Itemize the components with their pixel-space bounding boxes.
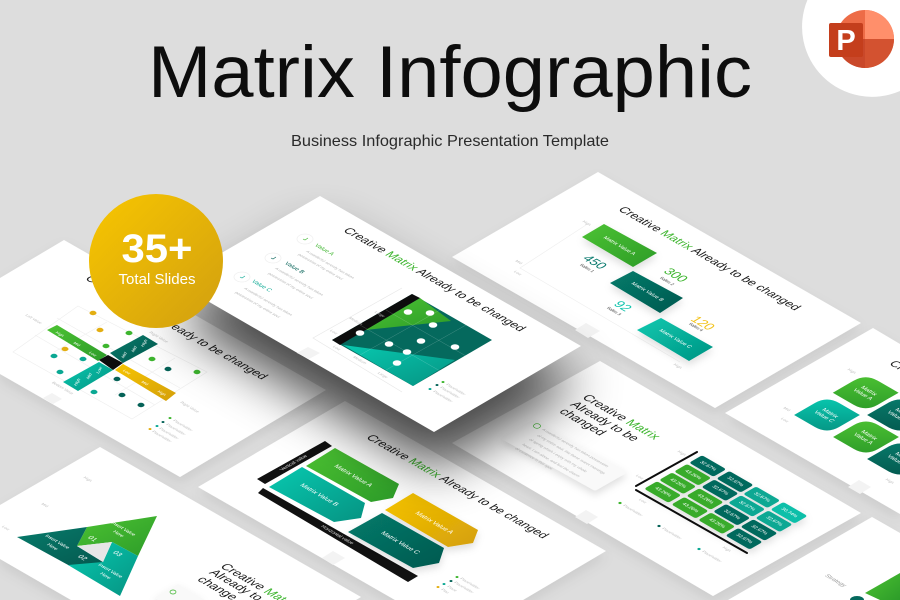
leaf: green lower: Value A bbox=[851, 432, 874, 446]
value item C: possession of my entire soul bbox=[234, 291, 282, 318]
axis labels: Mid bbox=[514, 259, 524, 265]
legend: Placeholder bbox=[445, 383, 468, 396]
cross arm: teal: High bbox=[73, 377, 81, 387]
percentage cells: 32.67% bbox=[722, 509, 742, 521]
percentage cells: 43.26% bbox=[695, 493, 715, 505]
text card: heart. I am alone, and feel the charm bbox=[521, 443, 582, 478]
badge: 35+ total slides: 35+ bbox=[122, 227, 192, 271]
panel: slide with arrow blocks bbox=[198, 401, 606, 600]
page tab bbox=[848, 480, 871, 494]
axis labels: Medium bbox=[352, 355, 369, 365]
block: yellow: Matrix Value A bbox=[413, 511, 456, 535]
title: Matrix Infographic bbox=[148, 32, 752, 113]
text card: of spring which I enjoy with my whole bbox=[528, 438, 590, 473]
band: vertical value bbox=[257, 441, 332, 484]
percentage cells: 32.67% bbox=[698, 460, 718, 472]
block: dark: Matrix Value C bbox=[379, 531, 422, 555]
dark marker bbox=[850, 596, 864, 600]
axis labels bbox=[1, 476, 94, 531]
slide title: changed bbox=[556, 406, 610, 437]
axis labels: Mid bbox=[782, 406, 792, 412]
percentage cells: 43.26% bbox=[680, 502, 700, 514]
axis labels: Mid bbox=[40, 502, 50, 508]
page tab bbox=[575, 323, 600, 338]
axis labels: Low bbox=[513, 270, 523, 276]
triangle chart: 01 bbox=[86, 535, 98, 543]
percentage cells: 32.67% bbox=[734, 533, 754, 545]
percentage cells bbox=[644, 455, 808, 549]
text card bbox=[155, 584, 205, 600]
stat: 300: Sales 2 bbox=[658, 276, 676, 286]
axis labels: High bbox=[846, 368, 858, 374]
stat: 92: 92 bbox=[610, 299, 636, 313]
value item A: possession of my entire soul bbox=[297, 253, 345, 280]
axis labels: High bbox=[676, 450, 688, 456]
block: yellow bbox=[385, 493, 478, 547]
leaf: teal bbox=[794, 396, 860, 434]
percentage cells: 32.67% bbox=[710, 485, 730, 496]
axis line: horizontal bbox=[636, 490, 747, 553]
page tab bbox=[322, 551, 345, 565]
cross arm: teal: Mid bbox=[85, 372, 93, 380]
axis labels: Large bbox=[373, 310, 387, 318]
percentage cells: 32.67% bbox=[764, 516, 784, 527]
cross arm: dark: Mid bbox=[130, 345, 138, 353]
subtitle: Business Infographic Presentation Template bbox=[291, 133, 609, 150]
box: matrix value C bbox=[637, 318, 713, 361]
cross center bbox=[99, 355, 123, 370]
axis labels: Low bbox=[635, 474, 645, 480]
legend: Placeholder bbox=[459, 577, 482, 590]
band: horizontal value bbox=[258, 488, 418, 582]
band: horizontal value: Horizontal value bbox=[319, 525, 355, 546]
panel: slide with percentage grid bbox=[452, 361, 861, 596]
badge: 35+ total slides bbox=[89, 194, 223, 328]
axis labels bbox=[635, 450, 733, 552]
value item B: Value B bbox=[282, 261, 305, 275]
axis labels: High bbox=[82, 476, 94, 482]
axis labels bbox=[513, 220, 684, 369]
text card bbox=[505, 423, 623, 488]
value item C: Value C bbox=[249, 279, 273, 293]
legend bbox=[148, 417, 195, 443]
text card: A wonderful serenity has taken possession bbox=[541, 428, 610, 468]
leaf: teal: Value C bbox=[812, 410, 836, 424]
triangle chart: Insert Value bbox=[109, 521, 137, 537]
green block bbox=[865, 573, 900, 600]
cross arm: green bbox=[47, 325, 107, 361]
stat: 450: Sales 1 bbox=[578, 263, 596, 273]
triangle chart: Here bbox=[111, 530, 125, 538]
legend: Placeholder bbox=[439, 386, 462, 399]
axis line: vertical bbox=[636, 452, 697, 486]
legend bbox=[436, 576, 482, 594]
leaf: teal: Matrix bbox=[820, 408, 839, 419]
stat: 120: 120 bbox=[687, 314, 719, 332]
page tab bbox=[297, 347, 320, 359]
axis labels bbox=[24, 313, 202, 414]
legend: Placeholder bbox=[158, 427, 181, 440]
triangle chart: Here bbox=[45, 543, 59, 551]
axis labels: High bbox=[721, 546, 733, 552]
percentage cells: 43.26% bbox=[707, 518, 727, 529]
axis labels: Large bbox=[376, 371, 390, 379]
legend: Place bbox=[446, 585, 459, 593]
legend: Placeholder bbox=[453, 581, 476, 594]
percentage cells: 43.26% bbox=[668, 478, 688, 489]
axis labels: High bbox=[581, 220, 593, 226]
chart points bbox=[356, 309, 459, 366]
cross arm: yellow bbox=[115, 364, 176, 401]
page tab bbox=[575, 510, 598, 524]
leaf: green upper bbox=[833, 374, 899, 412]
percentage cells: 32.67% bbox=[749, 524, 769, 536]
box: matrix value C: Matrix Value C bbox=[657, 329, 693, 349]
block: green: Matrix Value A bbox=[332, 464, 375, 488]
panel: slide with cross matrix bbox=[0, 240, 326, 477]
icon: powerpoint logo: P bbox=[836, 25, 856, 57]
text card: of my entire soul, like these sweet mornings bbox=[536, 434, 607, 475]
value item A: A wonderful serenity has taken bbox=[305, 250, 356, 279]
legend bbox=[428, 381, 468, 403]
axis labels: High bbox=[884, 478, 896, 484]
panel: slide with value boxes bbox=[452, 172, 861, 408]
cross arm: yellow: Mid bbox=[140, 380, 150, 386]
strategy label: Strategy bbox=[823, 574, 847, 588]
panel: slide with leaf matrix bbox=[725, 328, 900, 514]
axis labels: Low bbox=[329, 329, 339, 335]
legend: Placeholder bbox=[661, 527, 684, 540]
shadow cast by centre slide bbox=[173, 234, 581, 470]
value item B bbox=[265, 253, 325, 299]
axis labels bbox=[329, 310, 390, 379]
stat: 450: 450 bbox=[579, 253, 611, 271]
badge: 35+ total slides: Total Slides bbox=[118, 271, 196, 288]
cross arm: dark: High bbox=[140, 338, 148, 348]
icon: powerpoint logo bbox=[802, 0, 900, 97]
percentage cells: 43.26% bbox=[653, 486, 673, 498]
legend: Plac bbox=[440, 588, 451, 594]
axis labels: Right Value bbox=[148, 331, 171, 344]
triangle chart: Here bbox=[98, 572, 112, 580]
percentage cells: 30.74% bbox=[779, 507, 799, 519]
chart frame bbox=[313, 288, 402, 392]
cross arm: green: Mid bbox=[72, 341, 82, 347]
percentage cells: 43.26% bbox=[683, 469, 703, 481]
cross arm: green: Low bbox=[88, 351, 98, 357]
percentage cells: 32.67% bbox=[752, 492, 772, 503]
value item A bbox=[297, 234, 356, 280]
slide title: Creative Matrix Already to be changed bbox=[363, 433, 553, 540]
axis labels: Right Value bbox=[179, 401, 202, 414]
axis labels bbox=[780, 368, 896, 484]
legend: Placeholder bbox=[701, 550, 724, 563]
band: vertical value: Vertical value bbox=[279, 454, 310, 472]
box: matrix value B: Matrix Value B bbox=[629, 282, 665, 302]
slide title: Creative Matrix bbox=[579, 392, 664, 442]
slide title: Creative Matrix Already to be changed bbox=[82, 274, 272, 381]
cross arm: dark bbox=[110, 335, 158, 363]
triangle chart: Insert Value bbox=[43, 534, 71, 550]
cross arm: dark: Mid bbox=[120, 351, 128, 359]
value item A: Value A bbox=[312, 243, 335, 257]
triangle chart: 02 bbox=[76, 554, 88, 562]
value item C bbox=[234, 272, 294, 318]
axis labels: Low bbox=[638, 498, 648, 504]
axis labels: Left Value bbox=[24, 313, 44, 325]
panel: slide at lower right bbox=[728, 517, 900, 600]
triangle chart: 03 bbox=[111, 550, 123, 558]
axis labels: Low bbox=[1, 525, 11, 531]
cross arm: green: High bbox=[54, 331, 66, 337]
axis labels: High bbox=[672, 363, 684, 369]
slide title: Creative Matrix Already to be changed bbox=[340, 226, 530, 333]
box: matrix value A: Matrix Value A bbox=[601, 236, 637, 256]
legend: Placeholder bbox=[151, 430, 174, 443]
legend: Placeholder bbox=[165, 423, 188, 436]
box: matrix value B bbox=[610, 271, 683, 313]
slide title: Already to be bbox=[567, 399, 643, 443]
quadrant chart bbox=[332, 294, 492, 386]
value item B: possession of my entire soul bbox=[267, 272, 315, 299]
stat: 120: Sales 4 bbox=[687, 322, 705, 332]
cross arm: yellow: Low bbox=[122, 369, 132, 375]
scatter dots bbox=[50, 311, 200, 407]
leaf: green upper: Value A bbox=[851, 388, 874, 401]
slide title: Creative Matrix Already to be changed bbox=[615, 205, 805, 312]
leaf: dark lower bbox=[867, 440, 900, 478]
block: teal bbox=[269, 467, 365, 522]
value item C: A wonderful serenity has taken bbox=[243, 287, 294, 316]
text card: of existence in this spot. bbox=[514, 447, 555, 471]
legend: Placeholder bbox=[622, 504, 645, 517]
block: green bbox=[306, 448, 399, 502]
axis labels: Bottom Value bbox=[51, 381, 76, 396]
legend: Placeholder bbox=[172, 419, 195, 432]
triangle chart bbox=[17, 516, 157, 596]
panel: slide with quadrant chart bbox=[173, 196, 581, 432]
cross arm: yellow: High bbox=[156, 390, 168, 396]
leaf: dark upper bbox=[867, 396, 900, 434]
cross arm: teal: Low bbox=[95, 365, 103, 374]
panel: slide with triangle matrix bbox=[0, 447, 361, 600]
leaf: green lower bbox=[833, 418, 899, 456]
cross arm: teal bbox=[63, 362, 113, 391]
box: matrix value A bbox=[582, 224, 657, 267]
axis labels: Medium bbox=[348, 316, 365, 326]
legend bbox=[618, 502, 724, 563]
page tab bbox=[43, 393, 62, 404]
block: dark bbox=[348, 513, 444, 568]
leaf: green lower: Matrix bbox=[859, 430, 878, 441]
leaf: green upper: Matrix bbox=[859, 386, 878, 397]
value item B: A wonderful serenity has taken bbox=[274, 267, 325, 296]
stat: 300: 300 bbox=[660, 266, 692, 284]
percentage cells: 32.67% bbox=[737, 500, 757, 512]
legend: Placeholder bbox=[432, 390, 455, 403]
percentage cells: 32.67% bbox=[725, 476, 745, 488]
triangle chart: Insert Value bbox=[96, 563, 124, 579]
axis labels: Low bbox=[332, 345, 342, 351]
block: teal: Matrix Value B bbox=[298, 483, 340, 507]
stat: 92: Sales 3 bbox=[605, 306, 623, 316]
axis labels: Low bbox=[780, 417, 790, 423]
